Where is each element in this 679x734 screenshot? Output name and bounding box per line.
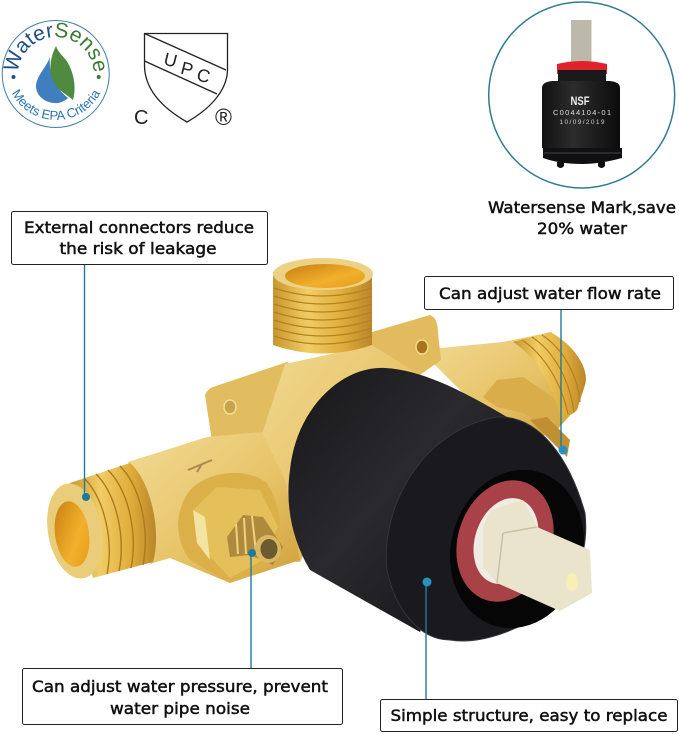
- text: Watersense caption: 20% water: [537, 219, 627, 238]
- red ring: [557, 61, 607, 74]
- base ring: [543, 148, 622, 164]
- callout: external connectors: the risk of leakage: [60, 239, 216, 258]
- spindle: [483, 500, 592, 611]
- logo: cUPC shield: [134, 34, 232, 130]
- C mark: C: [134, 107, 148, 129]
- cartridge stem: [571, 20, 592, 62]
- callout box: [380, 700, 678, 732]
- Meets EPA Criteria arc text: Meets EPA Criteria: [12, 89, 100, 120]
- flange hole right: [416, 340, 428, 354]
- right stem: [530, 417, 570, 457]
- right arm: [420, 332, 575, 440]
- black cylinder: [288, 368, 512, 632]
- callout: external connectors: External connectors reduce: [24, 218, 254, 237]
- date: 10/09/2019: [560, 119, 605, 126]
- logo: WaterSense: [2, 20, 110, 128]
- text: Watersense caption: [488, 198, 676, 238]
- right thread: [513, 332, 586, 416]
- right flange: [370, 315, 441, 375]
- pressure stem: [227, 515, 283, 565]
- left pipe end: [40, 479, 110, 583]
- white insert: [463, 490, 549, 592]
- text: Watersense caption: Watersense Mark,save: [488, 198, 676, 217]
- callout box: [22, 668, 342, 724]
- hex nut: [178, 473, 280, 583]
- right separator dot: [97, 75, 101, 79]
- callout box: [12, 212, 268, 264]
- leader line: [84, 265, 86, 497]
- feet: [557, 162, 605, 168]
- panel: cartridge in circle: [489, 2, 675, 188]
- cap opening: [433, 455, 601, 643]
- WaterSense arc wordmark: WaterSense: [3, 22, 104, 72]
- callout: simple structure: Simple structure, easy to replace: [390, 706, 668, 725]
- hot marking: [188, 460, 212, 472]
- left separator dot: [12, 75, 16, 79]
- registered mark: ®: [215, 104, 232, 130]
- callout: water pressure: water pipe noise: [110, 699, 250, 718]
- right nut: [483, 377, 560, 430]
- leaf: [50, 46, 75, 100]
- top pipe hole: [285, 264, 365, 288]
- U letter: U: [162, 49, 179, 71]
- C letter: C: [195, 65, 212, 87]
- leader line: [425, 582, 427, 699]
- callout box: [424, 276, 674, 310]
- left pipe hole: [51, 499, 93, 569]
- collar: [558, 70, 606, 83]
- central body: [248, 345, 420, 562]
- callout: external connectors: [12, 212, 268, 501]
- water drop: [36, 57, 68, 103]
- NSF: NSF: [570, 94, 590, 108]
- black front cap: [386, 417, 586, 641]
- valve illustration: [40, 258, 601, 643]
- callout: flow rate: Can adjust water flow rate: [439, 284, 661, 303]
- left thread: [70, 463, 156, 578]
- top pipe: [273, 258, 373, 354]
- callout: water pressure: Can adjust water pressure, prevent: [32, 677, 328, 696]
- left arm: [128, 432, 300, 583]
- callout: water pressure: [22, 549, 342, 724]
- leader dot: [248, 549, 256, 557]
- P letter: P: [179, 58, 195, 80]
- callout: simple structure: [380, 578, 678, 732]
- red ring: [441, 468, 569, 614]
- leader line: [560, 310, 562, 450]
- code: C0044104-01: [553, 108, 611, 117]
- leader dot: [558, 446, 568, 454]
- leader line: [250, 553, 252, 668]
- leader dot: [82, 493, 90, 501]
- leader dot: [422, 578, 432, 586]
- callout: flow rate: [424, 276, 674, 454]
- left flange: [205, 362, 310, 445]
- flange hole left: [224, 400, 236, 414]
- cartridge body: [542, 81, 620, 148]
